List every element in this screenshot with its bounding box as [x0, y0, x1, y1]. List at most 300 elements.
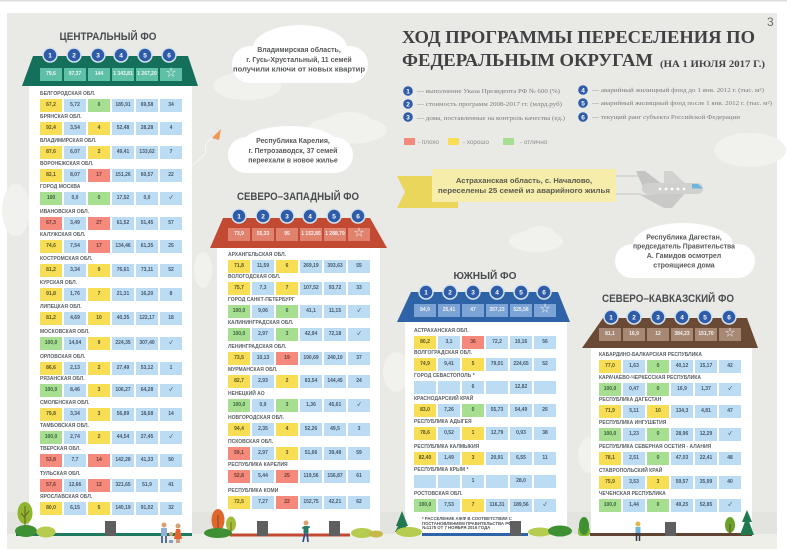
row: 107,52 — [303, 285, 319, 291]
faint background clouds — [2, 64, 786, 473]
row: 14 — [96, 457, 102, 463]
legend: indicators: — выполнение Указа Президента РФ № 600 (%) — [416, 88, 560, 95]
row: 2,51 — [629, 455, 639, 461]
row: 63,54 — [305, 378, 317, 384]
row: 1 — [472, 478, 474, 484]
row: 134,3 — [676, 408, 688, 414]
row: 0 — [472, 407, 474, 413]
bin — [665, 522, 676, 536]
row: 100,0 — [45, 340, 57, 346]
roof — [22, 56, 198, 86]
row: 8,07 — [70, 172, 80, 178]
row: 91,02 — [141, 505, 153, 511]
row: 7,54 — [70, 243, 80, 249]
row: ✓ — [728, 431, 732, 437]
row: 53,8 — [46, 457, 56, 463]
row: РЕСПУБЛИКА ИНГУШЕТИЯ — [599, 420, 666, 426]
main title: ХОД ПРОГРАММЫ ПЕРЕСЕЛЕНИЯ ПО — [402, 27, 755, 47]
indicator number badges: 1 — [237, 214, 241, 220]
row: 18 — [168, 315, 174, 321]
legend: colours: - хорошо — [463, 139, 489, 146]
row: 59,57 — [676, 479, 688, 485]
row: ЧЕЧЕНСКАЯ РЕСПУБЛИКА — [599, 491, 666, 497]
row: 1 — [170, 365, 172, 371]
row: 1,76 — [70, 291, 80, 297]
row: 7 — [472, 502, 474, 508]
row: 10 — [96, 315, 102, 321]
row: 33 — [356, 285, 362, 291]
row: 9 — [98, 340, 100, 346]
row: ОРЛОВСКАЯ ОБЛ. — [40, 354, 85, 360]
row: 0 — [657, 431, 659, 437]
row — [40, 304, 182, 325]
indicator number badges — [232, 209, 365, 223]
row — [414, 442, 560, 464]
row: ✓ — [728, 386, 732, 392]
indicator number badges — [43, 48, 176, 62]
row: ВОРОНЕЖСКАЯ ОБЛ. — [40, 161, 93, 167]
row: 224,65 — [513, 361, 529, 367]
row: 71,8 — [234, 263, 244, 269]
row: 156,87 — [327, 473, 343, 479]
row: 152,75 — [303, 499, 319, 505]
row: КРАСНОДАРСКИЙ КРАЙ — [414, 396, 473, 402]
roof values: ☆ — [540, 304, 550, 315]
row: 2,35 — [258, 426, 268, 432]
row: 100,0 — [233, 308, 245, 314]
heading: СЕВЕРО–КАВКАЗСКИЙ ФО — [602, 292, 734, 305]
row: 10,16 — [515, 339, 527, 345]
row — [228, 367, 370, 388]
row: 24 — [356, 378, 362, 384]
row: 4,81 — [701, 408, 711, 414]
indicator number badges: 4 — [495, 290, 499, 296]
row: 2 — [98, 149, 100, 155]
panel: Южный ФО — [395, 269, 572, 537]
roof values: 1 343,81 — [113, 71, 133, 77]
row: 34 — [168, 102, 174, 108]
row: 52 — [168, 267, 174, 273]
row: 17,52 — [117, 195, 129, 201]
row: 100,0 — [45, 434, 57, 440]
row: 80,2 — [420, 339, 430, 345]
row — [40, 138, 182, 159]
heading: ЦЕНТРАЛЬНЫЙ ФО — [60, 30, 157, 43]
row — [40, 184, 182, 205]
roof values: 1 288,79 — [325, 231, 345, 237]
row: 28,28 — [141, 125, 153, 131]
row: СМОЛЕНСКАЯ ОБЛ. — [40, 400, 89, 406]
ground band — [7, 512, 777, 549]
row: 9 — [98, 267, 100, 273]
row: 93,72 — [329, 285, 341, 291]
road — [422, 533, 528, 536]
indicator number badges: 2 — [448, 290, 452, 296]
row: 3,1 — [446, 339, 452, 345]
row: ЯРОСЛАВСКАЯ ОБЛ. — [40, 494, 92, 500]
row: 75,9 — [605, 479, 615, 485]
row: ✓ — [728, 502, 732, 508]
row: 21,31 — [117, 291, 129, 297]
bin — [510, 521, 521, 536]
row: 144,45 — [327, 378, 343, 384]
row: 28,0 — [516, 478, 526, 484]
row: 54,49 — [515, 407, 527, 413]
row: ГОРОД МОСКВА — [40, 184, 80, 190]
row: 7 — [98, 291, 100, 297]
legend: indicators: — текущий ранг субъекта Российской Федерации — [591, 114, 741, 121]
row: КАБАРДИНО-БАЛКАРСКАЯ РЕСПУБЛИКА — [599, 352, 702, 358]
callout cloud: Vladimir: Владимирская область, — [257, 46, 341, 54]
row: 240,10 — [327, 355, 343, 361]
row — [228, 344, 370, 365]
legend: indicators: — дома, поставленные на контроль качества (ед.) — [416, 115, 565, 122]
row — [228, 439, 370, 460]
main title — [402, 27, 765, 70]
row: 52,85 — [700, 502, 712, 508]
row: 17 — [96, 172, 102, 178]
callout cloud: Karelia: переехали в новое жилье — [248, 158, 338, 164]
callout cloud: Dagestan: А. Гамидов осмотрел — [647, 253, 721, 260]
row: 5,44 — [258, 473, 268, 479]
row: 5 — [98, 505, 100, 511]
row — [599, 489, 745, 512]
row: 140,19 — [115, 505, 131, 511]
row — [228, 252, 370, 273]
indicator number badges: 6 — [167, 52, 171, 60]
row — [228, 462, 370, 483]
row: 78,6 — [420, 430, 430, 436]
row: 72,18 — [329, 331, 341, 337]
row: 37 — [356, 355, 362, 361]
row: 14,04 — [69, 340, 81, 346]
road — [16, 533, 192, 536]
row: 151,26 — [115, 172, 131, 178]
row: 3 — [286, 450, 288, 456]
row — [40, 232, 182, 253]
roof values: 55,33 — [257, 231, 269, 237]
row — [40, 376, 182, 397]
icon: kite — [192, 129, 221, 166]
row: 224,35 — [115, 340, 131, 346]
page number: 3 — [767, 15, 774, 29]
row: 106,27 — [115, 387, 131, 393]
row: 0,0 — [72, 195, 78, 201]
roof values: 16,9 — [629, 331, 639, 337]
indicator number badges: 1 — [424, 290, 428, 296]
row: 26 — [542, 407, 548, 413]
row — [40, 471, 182, 492]
row — [40, 494, 182, 515]
row: 81,2 — [46, 267, 56, 273]
callout cloud: Dagestan: Республика Дагестан, — [646, 234, 722, 242]
row: 40 — [727, 479, 733, 485]
row — [599, 373, 745, 396]
row: 122,17 — [139, 315, 155, 321]
row: 7 — [286, 285, 288, 291]
row: 28,96 — [676, 431, 688, 437]
row: ✓ — [169, 195, 173, 201]
row: ТАМБОВСКАЯ ОБЛ. — [40, 423, 89, 429]
row: 3,53 — [629, 479, 639, 485]
row: 1,44 — [629, 502, 639, 508]
road — [590, 533, 752, 536]
row: 52 — [542, 361, 548, 367]
row — [40, 114, 182, 135]
row: 59,1 — [234, 450, 244, 456]
legend: colours: - отлично — [520, 139, 548, 146]
row: 7,27 — [258, 499, 268, 505]
row: 3 — [98, 387, 100, 393]
row: РЯЗАНСКАЯ ОБЛ. — [40, 376, 85, 382]
row: 86,6 — [46, 365, 56, 371]
row — [414, 328, 556, 349]
house body — [591, 348, 752, 534]
row: 0 — [657, 386, 659, 392]
row: 39,48 — [329, 450, 341, 456]
row: 67,3 — [46, 220, 56, 226]
row: 0,47 — [629, 386, 639, 392]
row: 49,41 — [117, 149, 129, 155]
row: ✓ — [357, 331, 361, 337]
callout cloud: Vladimir: г. Гусь-Хрустальный, 11 семей — [246, 56, 352, 64]
row — [414, 395, 556, 417]
row: 4,69 — [70, 315, 80, 321]
indicator number badges: 6 — [727, 314, 731, 322]
row: 69,58 — [141, 102, 153, 108]
row: 17 — [96, 243, 102, 249]
row: 55 — [356, 263, 362, 269]
row — [414, 465, 560, 488]
row: ✓ — [169, 434, 173, 440]
figure: person — [636, 522, 640, 541]
row: 15,17 — [700, 363, 712, 369]
row: 77,0 — [605, 363, 615, 369]
legend: indicators — [403, 85, 772, 122]
callout cloud: Dagestan: председатель Правительства — [633, 244, 735, 250]
row — [414, 350, 556, 371]
row: 27,49 — [117, 365, 129, 371]
row: 22 — [168, 172, 174, 178]
row: РЕСПУБЛИКА КОМИ — [228, 488, 278, 494]
row: 82,7 — [234, 378, 244, 384]
roof — [582, 318, 758, 348]
row: РЕСПУБЛИКА КРЫМ * — [414, 467, 468, 473]
row: 6 — [472, 384, 474, 390]
row — [228, 274, 370, 295]
roof values: 81,1 — [605, 331, 615, 337]
row: 41 — [168, 482, 174, 488]
row: 1,49 — [444, 455, 454, 461]
row: 45,61 — [329, 402, 341, 408]
row: ПСКОВСКАЯ ОБЛ. — [228, 439, 273, 445]
roof values: 357,23 — [489, 307, 505, 313]
roof values: ☆ — [166, 68, 176, 79]
row: РЕСПУБЛИКА КАРЕЛИЯ — [228, 462, 288, 468]
row — [40, 209, 182, 230]
row: 80,0 — [46, 505, 56, 511]
row: 11,59 — [257, 263, 269, 269]
footnote: * РАССЕЛЕНИЕ АЖФ В СООТВЕТСТВИИ С — [422, 516, 512, 521]
row: 9,41 — [444, 361, 454, 367]
row: 11 — [542, 455, 548, 461]
row: 12,82 — [515, 384, 527, 390]
indicator number badges: 3 — [96, 52, 100, 60]
indicator number badges: 1 — [609, 314, 613, 322]
trees — [578, 510, 754, 536]
row: 6 — [286, 263, 288, 269]
bins — [257, 521, 340, 536]
row: 22,41 — [700, 455, 712, 461]
row: 7 — [170, 149, 172, 155]
callout cloud: Dagestan: строящиеся дома — [653, 262, 715, 270]
row: 7,53 — [444, 502, 454, 508]
roof values: 73,9 — [234, 231, 244, 237]
row: 40,12 — [676, 363, 688, 369]
row: ВЛАДИМИРСКАЯ ОБЛ. — [40, 138, 96, 144]
row: 20,91 — [491, 455, 503, 461]
row: 8 — [170, 291, 172, 297]
roof values — [414, 303, 556, 317]
row: 2 — [286, 378, 288, 384]
row — [599, 442, 745, 464]
row: 51,9 — [142, 482, 152, 488]
main title: (НА 1 ИЮЛЯ 2017 Г.) — [660, 59, 765, 70]
row: КАЛУЖСКАЯ ОБЛ. — [40, 232, 85, 238]
row: 1,37 — [701, 386, 711, 392]
callout cloud: Karelia: Республика Карелия, — [256, 137, 330, 145]
figure: walking person — [302, 520, 310, 542]
row: 0,9 — [260, 402, 266, 408]
row: 35,99 — [700, 479, 712, 485]
callout cloud: Karelia: г. Петрозаводск, 37 семей — [249, 147, 337, 155]
roof values: 12 — [655, 331, 661, 337]
row: 42,94 — [305, 331, 317, 337]
row — [40, 280, 182, 301]
row: 11,15 — [329, 308, 341, 314]
row: 42,21 — [329, 499, 341, 505]
row: 100,0 — [419, 502, 431, 508]
indicator number badges: 3 — [471, 290, 475, 296]
row: 6 — [286, 308, 288, 314]
legend: indicators: 5 — [581, 100, 585, 107]
roof values: 97,37 — [69, 71, 81, 77]
row: ЛИПЕЦКАЯ ОБЛ. — [40, 304, 82, 310]
row: 49,5 — [330, 426, 340, 432]
roof values: 95 — [284, 231, 290, 237]
row: 2 — [98, 434, 100, 440]
row: МОСКОВСКАЯ ОБЛ. — [40, 329, 90, 335]
indicator number badges: 2 — [261, 214, 265, 220]
row: 2,97 — [258, 331, 268, 337]
row: 59 — [356, 450, 362, 456]
row: 2 — [98, 365, 100, 371]
row — [414, 373, 556, 394]
row — [40, 423, 182, 444]
row: 116,31 — [489, 502, 505, 508]
row: 32 — [168, 505, 174, 511]
row: 14 — [168, 411, 174, 417]
row: 2,13 — [70, 365, 80, 371]
row — [228, 390, 370, 412]
row: 25 — [284, 473, 290, 479]
row: 5,72 — [70, 102, 80, 108]
row: ТВЕРСКАЯ ОБЛ. — [40, 446, 81, 452]
row: ЛЕНИНГРАДСКАЯ ОБЛ. — [228, 344, 286, 350]
row: 73,5 — [234, 355, 244, 361]
roof values: 1 152,85 — [301, 231, 321, 237]
row: МУРМАНСКАЯ ОБЛ. — [228, 367, 277, 373]
row: 55,73 — [491, 407, 503, 413]
row: 56,89 — [117, 411, 129, 417]
legend: indicators: 3 — [406, 114, 410, 121]
row: 12,66 — [69, 482, 81, 488]
row: 94,4 — [234, 426, 244, 432]
row: ✓ — [169, 387, 173, 393]
row: НЕНЕЦКИЙ АО — [228, 391, 265, 397]
row: 91,8 — [46, 291, 56, 297]
row: 19 — [284, 355, 290, 361]
row: АСТРАХАНСКАЯ ОБЛ. — [414, 328, 469, 334]
row: 0 — [657, 363, 659, 369]
row: ГОРОД САНКТ-ПЕТЕРБУРГ — [228, 297, 295, 303]
row: 72,5 — [234, 499, 244, 505]
row: РЕСПУБЛИКА СЕВЕРНАЯ ОСЕТИЯ - АЛАНИЯ — [599, 444, 711, 450]
row: 61,52 — [117, 220, 129, 226]
row: СТАВРОПОЛЬСКИЙ КРАЙ — [599, 468, 662, 474]
row: 0,52 — [444, 430, 454, 436]
row: 12 — [96, 482, 102, 488]
row: 100,0 — [604, 431, 616, 437]
row: 189,56 — [513, 502, 529, 508]
row: 7,26 — [444, 407, 454, 413]
row: 74,9 — [420, 361, 430, 367]
row — [414, 489, 560, 512]
row: 0 — [98, 102, 100, 108]
row: КАРАЧАЕВО-ЧЕРКЕССКАЯ РЕСПУБЛИКА — [599, 375, 701, 381]
row: 269,19 — [303, 263, 319, 269]
row: 18,68 — [141, 411, 153, 417]
row: 4 — [170, 125, 172, 131]
row: 1,23 — [629, 431, 639, 437]
row: 100,0 — [233, 402, 245, 408]
callout banner: Astrakhan: Астраханская область, с. Началово, — [456, 176, 592, 185]
row: 9,06 — [258, 308, 268, 314]
roof values: 1 267,20 — [137, 71, 157, 77]
roof values: ☆ — [354, 228, 364, 239]
roof values — [40, 67, 182, 81]
row: 81,2 — [46, 315, 56, 321]
indicator number badges: 1 — [48, 52, 52, 60]
row — [228, 488, 370, 509]
row: 67,2 — [46, 102, 56, 108]
row: РЕСПУБЛИКА КАЛМЫКИЯ — [414, 444, 479, 450]
legend: indicators: 1 — [406, 88, 410, 95]
row: 51,45 — [141, 220, 153, 226]
row: 142,28 — [115, 457, 131, 463]
row: 7,3 — [260, 285, 266, 291]
roof values: 84,9 — [420, 307, 430, 313]
row: 52,8 — [234, 473, 244, 479]
row: 83,0 — [420, 407, 430, 413]
row: РЕСПУБЛИКА ДАГЕСТАН — [599, 397, 661, 403]
row — [599, 466, 745, 488]
tree and bushes — [15, 502, 56, 538]
row: 27,45 — [141, 434, 153, 440]
row: 40,35 — [117, 315, 129, 321]
row: 2,93 — [258, 378, 268, 384]
indicator number badges: 5 — [143, 52, 147, 60]
